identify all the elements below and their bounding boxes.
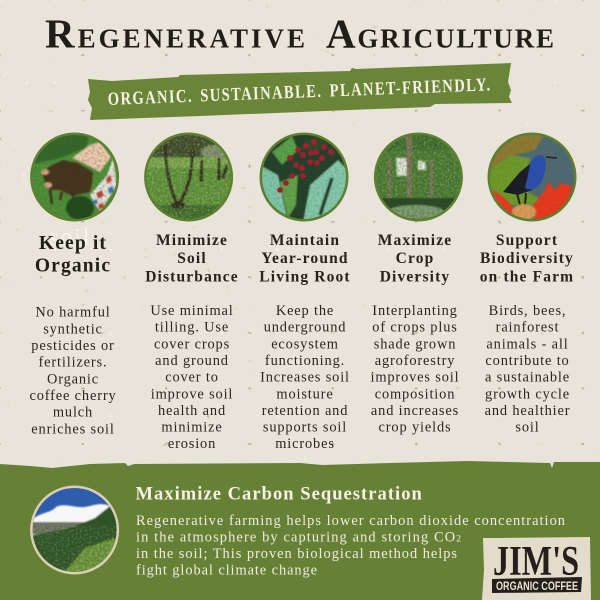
heading [259,232,351,286]
photo: hands holding soil [30,132,120,223]
description: mulch [53,405,93,421]
photo: coffee trees on green ground [144,132,235,225]
description: functioning. [265,353,345,369]
description: Interplanting [372,303,458,319]
description: Birds, bees, [489,303,566,319]
description: pesticides or [31,338,115,354]
description: rainforest [496,320,559,336]
description: Organic [47,371,99,387]
description: supports soil [263,420,347,436]
column: Maintain Year-round Living Root [259,132,351,452]
banner: tagline: ORGANIC. SUSTAINABLE. PLANET-FRIENDLY. [107,75,492,110]
heading: Living Root [259,268,351,286]
heading: Organic [35,256,111,276]
logo: Jim's Organic Coffee [482,537,591,600]
heading [145,232,239,286]
description: composition [375,386,455,402]
heading: Diversity [380,268,450,286]
description: ecosystem [271,336,339,352]
column: Support Biodiversity on the Farm [480,132,578,436]
heading: Crop [396,250,434,267]
description [136,513,565,578]
description: underground [264,320,346,336]
description [485,303,570,436]
description: growth cycle [485,386,570,402]
description: a sustainable [485,370,570,386]
heading: Maintain [270,232,340,249]
photo: mountain landscape with clouds [30,486,120,576]
description: of crops plus [372,320,458,336]
description: retention and [262,403,348,419]
heading: Year-round [261,250,349,267]
title [45,11,554,57]
description: tilling. Use [155,320,229,336]
description: microbes [275,436,335,452]
description: erosion [168,436,216,452]
description: improve soil [151,386,233,402]
title: AGRICULTURE [326,11,554,57]
description: agroforestry [375,353,455,369]
description [370,303,460,436]
heading: Maximize Carbon Sequestration [136,484,423,504]
photo: shade-grown forest [374,132,464,226]
heading: Disturbance [145,268,239,286]
description: Use minimal [150,303,234,319]
description: enriches soil [31,421,115,437]
description: in the atmosphere by capturing and storing CO2 [136,530,461,546]
photo: blue bird on red flowers [488,132,578,223]
heading: Support [496,232,558,249]
description [150,303,234,452]
heading: Biodiversity [480,250,574,267]
description: No harmful [35,305,111,321]
title: REGENERATIVE [45,11,305,57]
description: in the soil; This proven biological method helps [136,546,457,562]
description: animals - all [486,336,569,352]
description [260,303,350,452]
description: Regenerative farming helps lower carbon dioxide concentration [136,513,565,529]
description: soil [515,420,540,436]
description [29,305,117,437]
ghost word: soil [49,224,91,251]
heading: Minimize [156,232,228,249]
description: Keep the [276,303,334,319]
description: crop yields [379,420,451,436]
description: moisture [276,386,334,402]
panel: carbon sequestration [0,461,600,600]
heading [35,233,111,276]
description: improves soil [370,370,460,386]
description: synthetic [43,321,103,337]
description: health and [158,403,226,419]
description: fertilizers. [39,355,107,371]
photo: red coffee cherries and leaves [260,132,350,223]
column: Keep it Organic [29,132,120,437]
heading: on the Farm [480,268,574,286]
banner: tagline [88,63,512,120]
heading: Soil [177,250,207,267]
description: Increases soil [260,370,350,386]
description: and increases [371,403,459,419]
description: coffee cherry [29,388,117,404]
description: and healthier [485,403,570,419]
description: contribute to [485,353,570,369]
description: minimize [161,420,223,436]
description: and ground [155,353,229,369]
description: cover to [165,370,219,386]
heading [378,232,452,286]
description: shade grown [374,336,456,352]
column: Maximize Crop Diversity [370,132,464,436]
column: Minimize Soil Disturbance [144,132,239,452]
description: fight global climate change [136,562,317,578]
description: cover crops [154,336,230,352]
heading: Keep it [39,233,107,254]
heading: Maximize [378,232,452,249]
heading [480,232,574,286]
